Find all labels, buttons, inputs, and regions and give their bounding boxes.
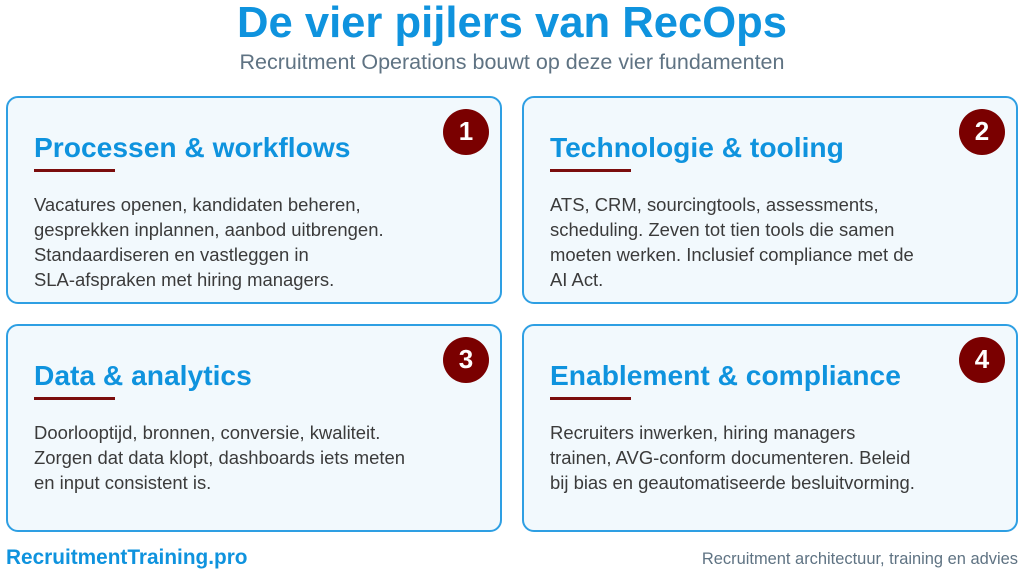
number badge 2 <box>959 109 1005 155</box>
text: processen: gesprekken inplannen, aanbod uitbrengen. <box>34 219 384 240</box>
heading: data: Data & analytics <box>34 359 252 391</box>
number badge 2: 2 <box>975 116 989 146</box>
heading: technologie: Technologie & tooling <box>550 131 844 163</box>
text: technologie: moeten werken. Inclusief compliance met de <box>550 244 914 265</box>
panel: data en analytics <box>6 324 502 532</box>
text: processen: Vacatures openen, kandidaten beheren, <box>34 194 361 215</box>
footer tagline: Recruitment architectuur, training en advies <box>702 550 1018 568</box>
accent rule: enablement <box>550 396 631 400</box>
accent rule: processen <box>34 168 115 172</box>
accent rule: data <box>34 396 115 400</box>
text: enablement <box>550 422 915 493</box>
text: technologie: AI Act. <box>550 269 603 290</box>
heading: enablement: Enablement & compliance <box>550 359 901 391</box>
text: processen: SLA-afspraken met hiring managers. <box>34 269 334 290</box>
number badge 4 <box>959 337 1005 383</box>
text: processen <box>34 194 384 290</box>
accent rule: technologie <box>550 168 631 172</box>
subtitle: Recruitment Operations bouwt op deze vier fundamenten <box>240 50 784 74</box>
number badge 3 <box>443 337 489 383</box>
panel: technologie en tooling <box>522 96 1018 304</box>
panel: enablement en compliance <box>522 324 1018 532</box>
heading: processen: Processen & workflows <box>34 131 350 163</box>
text: data <box>34 422 405 493</box>
text: enablement: trainen, AVG-conform documenteren. Beleid <box>550 447 910 468</box>
number badge 4: 4 <box>975 344 989 374</box>
text: data: en input consistent is. <box>34 472 211 493</box>
panel: processen en workflows <box>6 96 502 304</box>
text: technologie <box>550 194 914 290</box>
text: technologie: ATS, CRM, sourcingtools, assessments, <box>550 194 879 215</box>
text: technologie: scheduling. Zeven tot tien tools die samen <box>550 219 894 240</box>
text: enablement: bij bias en geautomatiseerde besluitvorming. <box>550 472 915 493</box>
footer brand: RecruitmentTraining.pro <box>6 546 248 569</box>
title: De vier pijlers van RecOps <box>237 0 787 47</box>
number badge 1: 1 <box>459 116 473 146</box>
text: data: Doorlooptijd, bronnen, conversie, kwaliteit. <box>34 422 380 443</box>
text: data: Zorgen dat data klopt, dashboards iets meten <box>34 447 405 468</box>
number badge 3: 3 <box>459 344 473 374</box>
text: enablement: Recruiters inwerken, hiring managers <box>550 422 855 443</box>
text: processen: Standaardiseren en vastleggen in <box>34 244 309 265</box>
number badge 1 <box>443 109 489 155</box>
